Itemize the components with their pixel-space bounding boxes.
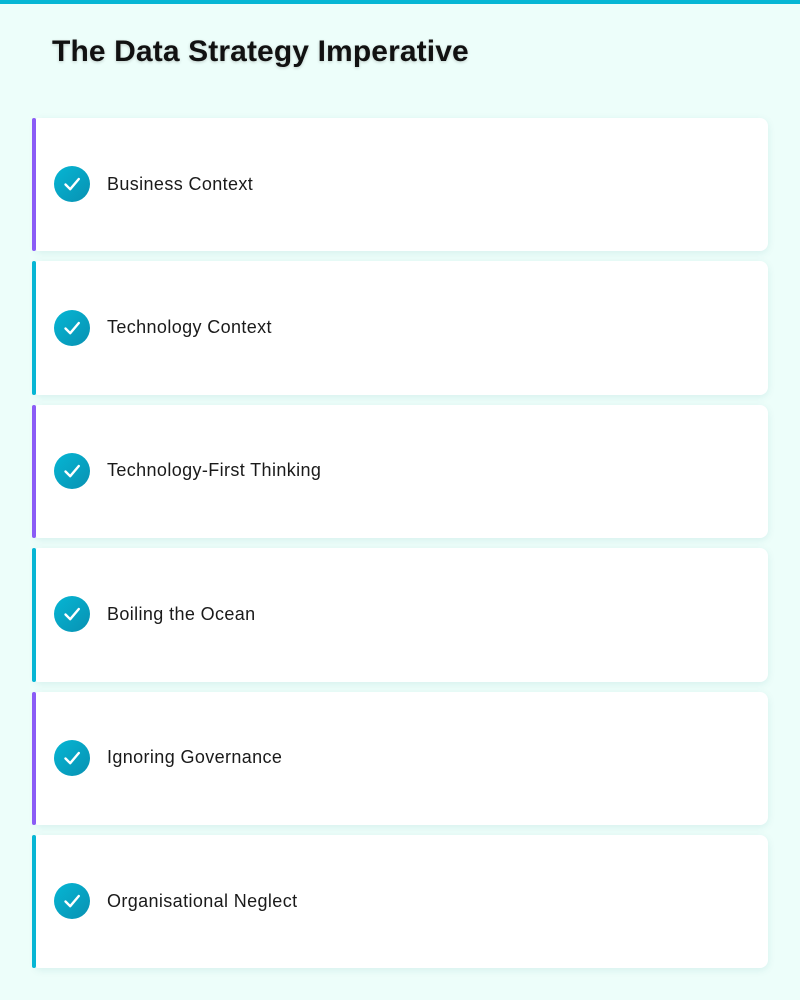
icon: check	[54, 166, 90, 202]
icon: check	[54, 883, 90, 919]
text: Business Context: Business Context	[107, 174, 253, 194]
panel: Technology-First Thinking	[32, 405, 770, 542]
panel: Business Context	[32, 118, 770, 254]
panel: Organisational Neglect	[32, 835, 770, 972]
panel: Ignoring Governance	[32, 692, 770, 828]
text: Boiling the Ocean: Boiling the Ocean	[107, 604, 256, 624]
text: Ignoring Governance: Ignoring Governance	[107, 747, 282, 767]
icon: check	[54, 596, 90, 632]
icon: check	[54, 740, 90, 776]
title: The Data Strategy Imperative	[52, 35, 469, 68]
top accent bar	[0, 0, 800, 4]
text: Organisational Neglect: Organisational Neglect	[107, 891, 297, 911]
panel: Boiling the Ocean	[32, 548, 770, 686]
text: Technology Context: Technology Context	[107, 317, 272, 337]
icon: check	[54, 310, 90, 346]
text: Technology-First Thinking: Technology-First Thinking	[107, 460, 321, 480]
icon: check	[54, 453, 90, 489]
panel: Technology Context	[32, 261, 770, 398]
